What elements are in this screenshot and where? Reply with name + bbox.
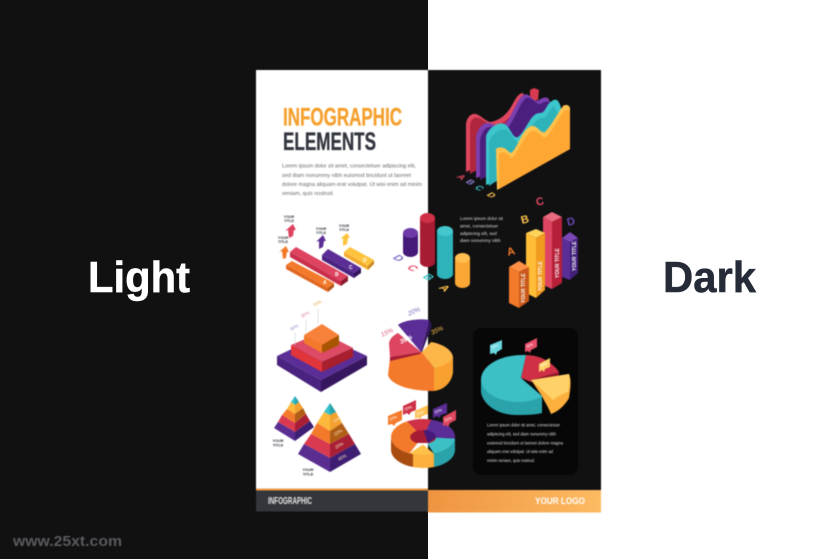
orange wave: [499, 110, 570, 189]
dark small text block: diam nonummy nibh: [460, 238, 501, 243]
dark small text block: [460, 216, 504, 243]
isometric bar list: [278, 215, 374, 292]
bar titles: TITLE: [339, 228, 350, 232]
red block: [530, 88, 539, 101]
pyramid titles: YOUR: [303, 468, 314, 472]
cylinder letters: [389, 254, 453, 293]
large layered pyramid: 45%: [337, 453, 347, 462]
large pie chart: [481, 338, 571, 415]
bar B: B: [335, 272, 339, 278]
base layer: [277, 335, 367, 392]
intro text block: [282, 164, 422, 197]
watermark: www.25xt.com: [12, 533, 122, 550]
bar titles: TITLE: [278, 240, 289, 244]
intro text block: Lorem ipsum dolor sit amet, consectetuer adipiscing elit,: [282, 164, 416, 170]
cylinder letters: C: [403, 264, 421, 273]
cylinder letters: D: [389, 254, 407, 263]
title: ELEMENTS: [283, 128, 376, 156]
big pie text block: minim veniam, quis nostrud.: [487, 458, 535, 463]
red segment: [407, 419, 431, 431]
big pie text block: aliquam erat volutpat. Ut wisi enim ad: [487, 449, 553, 454]
hole: [409, 429, 437, 445]
big pie text block: euismod tincidunt ut laoreet dolore magna: [487, 440, 563, 446]
pyramid labels: 30%: [289, 323, 299, 332]
cylinder letters: B: [419, 273, 437, 282]
poster: [256, 70, 601, 512]
footer logo: YOUR LOGO: [535, 496, 585, 506]
pyramid labels: 70%: [312, 299, 322, 308]
tag: yellow: 20%: [540, 361, 548, 368]
3D column chart: [506, 195, 578, 308]
orange segment: [391, 421, 418, 453]
orange column: YOUR TITLE: [521, 273, 527, 303]
bar titles: YOUR: [284, 215, 295, 219]
intro text block: veniam, quis nostrud.: [282, 191, 334, 197]
column letters: A: [506, 245, 517, 259]
axis letters: C: [472, 184, 487, 192]
label: Dark: Dark: [663, 253, 756, 302]
title: [283, 104, 402, 156]
footer label: INFOGRAPHIC: [268, 496, 312, 507]
pyramid titles: YOUR: [273, 439, 284, 443]
purple wave: [476, 94, 552, 178]
bar titles: TITLE: [316, 231, 327, 235]
column letters: [506, 195, 577, 259]
yellow cylinder: [455, 253, 470, 288]
bar titles: [278, 215, 350, 244]
teal slice: [481, 355, 542, 415]
bar A: A: [323, 280, 327, 286]
pie labels: [380, 306, 445, 346]
pie labels: 20%: [406, 306, 422, 318]
large layered pyramid: [298, 403, 361, 472]
top layer: [304, 324, 339, 353]
panel: dark poster half: [428, 70, 601, 490]
big pie text block: [487, 422, 563, 463]
bar titles: YOUR: [316, 227, 327, 231]
teal cylinder: [437, 226, 453, 279]
yellow column: YOUR TITLE: [538, 261, 544, 291]
bar titles: TITLE: [284, 219, 295, 223]
dark small text block: adipiscing elit, sed: [460, 231, 497, 236]
red slice: [521, 355, 559, 384]
arrows: [279, 246, 289, 259]
axis letters: B: [463, 178, 478, 186]
yellow slice: [531, 374, 571, 414]
pie labels: 35%: [430, 325, 445, 337]
title: INFOGRAPHIC: [283, 104, 402, 132]
big pie text block: adipiscing elit, sed diam nonummy nibh: [487, 432, 556, 436]
orange slice: [388, 352, 434, 391]
pie labels: 15%: [380, 327, 395, 339]
pyramid titles: [273, 439, 314, 476]
yellow slice: [422, 342, 453, 391]
teal segment: [427, 438, 455, 454]
wave area chart: [454, 88, 570, 199]
stepped pyramid: [277, 299, 367, 392]
purple column: YOUR TITLE: [572, 241, 578, 271]
yellow segment: [410, 444, 434, 455]
donut tags: 25%: [443, 415, 453, 423]
panel: light poster half: [256, 70, 428, 490]
small layered pyramid: [274, 396, 314, 441]
bar D: D: [363, 258, 367, 264]
middle layer: [291, 332, 353, 372]
cylinder letters: A: [435, 284, 453, 293]
donut tags: 20%: [388, 414, 398, 422]
axis letters: A: [454, 173, 469, 181]
bar titles: YOUR: [278, 236, 289, 240]
big pie text block: Lorem ipsum dolor sit amet, consectetuer: [487, 422, 560, 428]
bar titles: YOUR: [339, 224, 350, 228]
pyramid titles: TITLE: [273, 444, 284, 448]
tag: pink: 20%: [526, 342, 534, 349]
footer: dark side: [428, 490, 601, 512]
cylinder chart: [389, 213, 470, 293]
large layered pyramid: 20%: [334, 441, 344, 450]
purple cylinder: [403, 228, 418, 257]
donut chart: [388, 400, 456, 468]
teal wave: [486, 100, 561, 185]
pyramid titles: TITLE: [303, 472, 314, 476]
red cylinder: [420, 213, 435, 267]
purple slice: [398, 319, 431, 352]
dark background half: [0, 0, 428, 559]
column letters: C: [535, 195, 546, 209]
donut tags: [388, 400, 456, 427]
donut tags: 20%: [403, 404, 413, 412]
orange wave side: [496, 105, 570, 190]
column letters: B: [520, 213, 531, 227]
bar C: C: [349, 265, 353, 271]
pyramid labels: 35%: [300, 310, 310, 319]
large layered pyramid: 10%: [333, 428, 343, 437]
large layered pyramid: 10%: [332, 415, 342, 424]
exploded pie chart: [380, 306, 453, 391]
dark small text block: Lorem ipsum dolor sit: [460, 216, 504, 221]
footer: light side: [256, 488, 428, 512]
pink column: YOUR TITLE: [555, 248, 561, 278]
donut tags: 20%: [415, 409, 425, 417]
dark small text block: amet, consectetuer: [460, 224, 499, 228]
axis letters: D: [484, 191, 499, 199]
purple segment: [426, 420, 455, 439]
label: Light: Light: [88, 253, 190, 302]
side walls: [391, 437, 413, 467]
column letters: D: [566, 215, 577, 229]
donut tags: 20%: [433, 407, 443, 415]
tag: teal: 50%: [491, 343, 499, 350]
intro text block: dolore magna aliquam erat volutpat. Ut wisi enim ad minim: [282, 182, 422, 188]
red wave: [466, 93, 535, 172]
intro text block: sed diam nonummy nibh euismod tincidunt ut laoreet: [282, 173, 411, 179]
red slice: [389, 333, 421, 361]
axis letters: [454, 173, 499, 199]
pie labels: 39%: [399, 334, 414, 346]
pyramid labels: [289, 299, 322, 345]
panel: big pie card: [473, 328, 578, 475]
